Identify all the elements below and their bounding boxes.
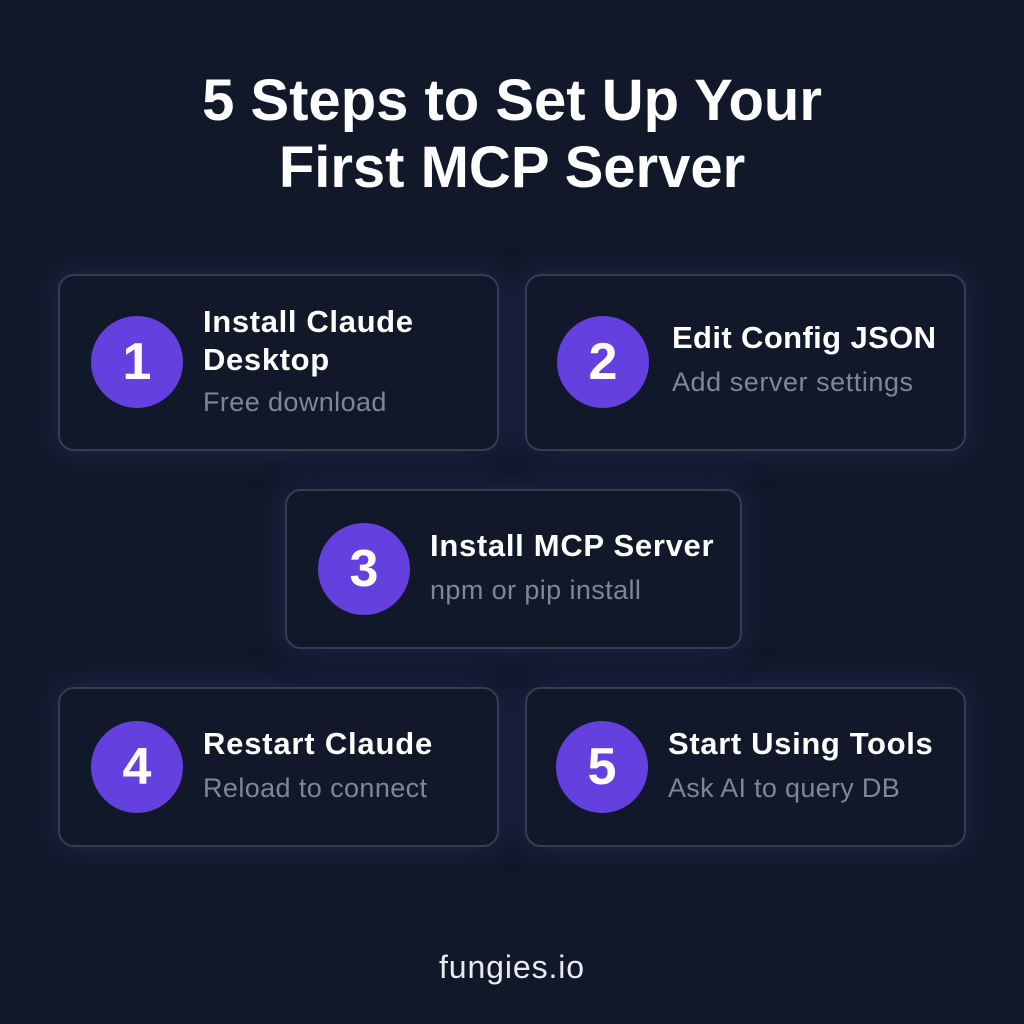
step 1 heading: Desktop — [203, 342, 330, 377]
step 2 heading: Edit Config JSON — [672, 320, 936, 355]
panel: step 3 — [285, 489, 742, 649]
step 5 number badge: 5 — [588, 738, 616, 796]
step 2 description: Add server settings — [672, 367, 914, 397]
step 4 heading: Restart Claude — [203, 726, 433, 761]
step 4 number badge — [91, 721, 183, 813]
panel: step 2 — [525, 274, 966, 451]
step 1 heading — [203, 304, 414, 377]
panel: step 4 — [58, 687, 499, 847]
step 2 number badge: 2 — [589, 333, 617, 391]
step 1 heading: Install Claude — [203, 304, 414, 339]
step 4 number badge: 4 — [123, 738, 151, 796]
step 1 description: Free download — [203, 387, 387, 417]
step 1 number badge — [91, 316, 183, 408]
step 1 number badge: 1 — [123, 333, 151, 391]
panel: step 5 — [525, 687, 966, 847]
footer brand: fungies.io — [439, 949, 585, 985]
step 2 number badge — [557, 316, 649, 408]
step 3 description: npm or pip install — [430, 575, 641, 605]
step 3 number badge — [318, 523, 410, 615]
step 4 description: Reload to connect — [203, 773, 427, 803]
step 3 heading: Install MCP Server — [430, 528, 714, 563]
step 5 heading: Start Using Tools — [668, 726, 933, 761]
title — [202, 68, 822, 200]
panel: step 1 — [58, 274, 499, 451]
title: 5 Steps to Set Up Your — [202, 68, 822, 133]
title: First MCP Server — [279, 135, 745, 200]
step 5 description: Ask AI to query DB — [668, 773, 900, 803]
step 5 number badge — [556, 721, 648, 813]
step 3 number badge: 3 — [350, 540, 378, 598]
